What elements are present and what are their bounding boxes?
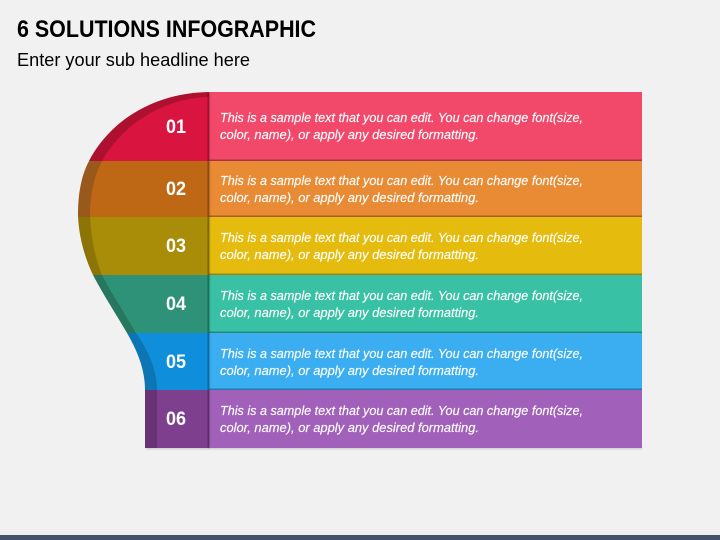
text 4 bbox=[220, 289, 583, 320]
footer bar bbox=[0, 535, 720, 540]
text 3: color, name), or apply any desired formatting. bbox=[220, 248, 479, 262]
text 1: This is a sample text that you can edit. You can change font(size, bbox=[220, 111, 583, 125]
number 06: 06 bbox=[166, 409, 186, 430]
text 5 bbox=[220, 347, 583, 378]
text 4: This is a sample text that you can edit. You can change font(size, bbox=[220, 289, 583, 303]
row 3 bbox=[166, 231, 583, 262]
subtitle: Enter your sub headline here bbox=[17, 50, 250, 70]
text 2: color, name), or apply any desired formatting. bbox=[220, 191, 479, 205]
bulb band rim bbox=[70, 90, 210, 448]
number 02: 02 bbox=[166, 179, 186, 200]
text 4: color, name), or apply any desired formatting. bbox=[220, 306, 479, 320]
bulb inner segments bbox=[90, 97, 209, 448]
bar shadows bbox=[208, 93, 642, 448]
row 5 bbox=[166, 347, 583, 378]
row 1 bbox=[166, 111, 583, 142]
text 6: This is a sample text that you can edit. You can change font(size, bbox=[220, 404, 583, 418]
number 05: 05 bbox=[166, 352, 186, 373]
bottom drop shadow bbox=[146, 447, 642, 449]
row 6 bbox=[166, 404, 583, 435]
text 2 bbox=[220, 174, 583, 205]
text 1: color, name), or apply any desired formatting. bbox=[220, 128, 479, 142]
text 3: This is a sample text that you can edit. You can change font(size, bbox=[220, 231, 583, 245]
colour bars bbox=[209, 92, 642, 448]
text 5: color, name), or apply any desired formatting. bbox=[220, 364, 479, 378]
text 6 bbox=[220, 404, 583, 435]
number 03: 03 bbox=[166, 236, 186, 257]
row 4 bbox=[166, 289, 583, 320]
text 3 bbox=[220, 231, 583, 262]
number 01: 01 bbox=[166, 117, 186, 138]
text 5: This is a sample text that you can edit. You can change font(size, bbox=[220, 347, 583, 361]
text 1 bbox=[220, 111, 583, 142]
title: 6 SOLUTIONS INFOGRAPHIC bbox=[17, 16, 316, 43]
number 04: 04 bbox=[166, 294, 186, 315]
text 2: This is a sample text that you can edit. You can change font(size, bbox=[220, 174, 583, 188]
text 6: color, name), or apply any desired formatting. bbox=[220, 421, 479, 435]
bulb shape bbox=[70, 90, 210, 448]
row 2 bbox=[166, 174, 583, 205]
